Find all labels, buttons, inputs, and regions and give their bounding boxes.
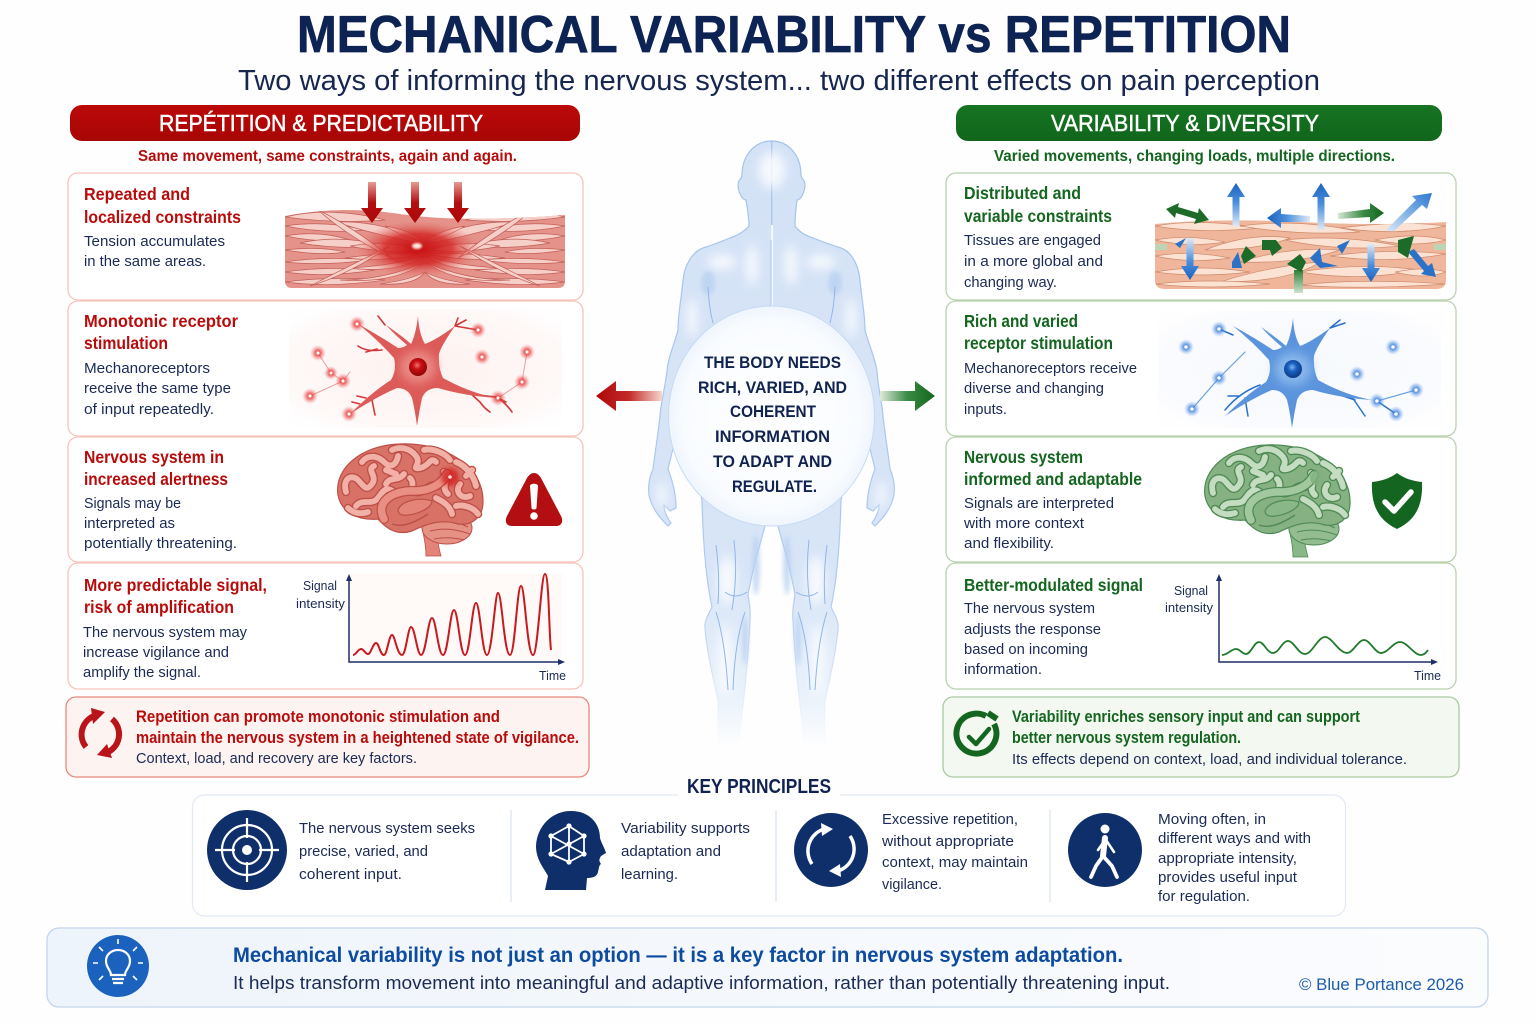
card heading: localized constraints	[84, 207, 241, 227]
card body text: Mechanoreceptors	[84, 360, 210, 377]
icon: light bulb	[87, 935, 149, 997]
card body text: in a more global and	[964, 253, 1103, 270]
central body figure	[649, 141, 894, 748]
chart axis labels: Signal	[1174, 583, 1208, 598]
card body text: information.	[964, 661, 1042, 678]
card heading: Monotonic receptor	[84, 311, 238, 331]
conclusion headline: Mechanical variability is not just an option — it is a key factor in nervous system adaptation.	[233, 943, 1123, 967]
icon: warning triangle	[506, 473, 562, 526]
callout text: maintain the nervous system in a heightened state of vigilance.	[136, 729, 579, 747]
card body text	[964, 360, 1137, 418]
card body text: Signals are interpreted	[964, 495, 1114, 512]
principle text: vigilance.	[882, 876, 942, 893]
card body text: increase vigilance and	[83, 644, 229, 661]
chart axis labels: intensity	[1165, 600, 1213, 615]
icon: cycle arrows	[794, 813, 868, 887]
arrows: multiple directions	[1166, 183, 1436, 293]
callout text: Repetition can promote monotonic stimulation and	[136, 708, 500, 726]
card body text	[963, 495, 1114, 552]
callout note: Context, load, and recovery are key factors.	[136, 750, 417, 767]
card heading: More predictable signal,	[84, 575, 267, 595]
card body text: adjusts the response	[964, 621, 1101, 638]
card heading: Better-modulated signal	[964, 575, 1143, 595]
chart: stable signal	[1165, 574, 1441, 683]
illustration: tense muscle fibres	[285, 182, 565, 288]
card: rich and varied receptor stimulation	[946, 301, 1456, 436]
card: distributed and variable constraints	[946, 173, 1456, 300]
card body text	[84, 360, 231, 418]
card heading	[84, 311, 238, 353]
card: monotonic receptor stimulation	[68, 301, 583, 436]
principle text: for regulation.	[1158, 888, 1250, 905]
card heading: risk of amplification	[84, 597, 234, 617]
principle text	[881, 811, 1028, 893]
callout note: Its effects depend on context, load, and individual tolerance.	[1012, 751, 1407, 768]
card heading: Nervous system	[964, 447, 1083, 467]
chart axis labels	[1165, 583, 1441, 683]
card body text: Tissues are engaged	[964, 232, 1101, 249]
principle 4: moving often	[1068, 811, 1311, 905]
illustration: red neuron	[289, 309, 562, 428]
principle 2: adaptation	[536, 811, 750, 890]
conclusion text: It helps transform movement into meaningful and adaptive information, rather than potentially threatening input.	[233, 972, 1170, 993]
card body text: based on incoming	[964, 641, 1088, 658]
right header banner: variability: VARIABILITY & DIVERSITY	[1051, 110, 1319, 136]
card body text: inputs.	[964, 401, 1007, 418]
principle 3: excessive repetition	[794, 811, 1028, 893]
icon: walking person	[1068, 813, 1142, 887]
left header banner: repetition	[70, 105, 580, 141]
card heading: stimulation	[84, 333, 168, 353]
callout text	[136, 708, 579, 747]
principle text: Moving often, in	[1158, 811, 1266, 828]
card body text	[964, 600, 1101, 678]
central message text: RICH, VARIED, AND	[698, 378, 847, 397]
card body text: potentially threatening.	[84, 535, 237, 552]
principle text: without appropriate	[881, 833, 1014, 850]
card heading: variable constraints	[964, 206, 1112, 226]
callout text	[1012, 708, 1360, 747]
icon: green circular check	[956, 713, 997, 754]
principle text: provides useful input	[1158, 869, 1298, 886]
copyright: © Blue Portance 2026	[1299, 975, 1464, 994]
card body text: interpreted as	[84, 515, 175, 532]
card body text: and flexibility.	[964, 535, 1054, 552]
card: repeated and localized constraints	[68, 173, 583, 300]
principle text	[299, 820, 475, 883]
subtitle: Two ways of informing the nervous system... two different effects on pain perception	[238, 65, 1320, 97]
icon: target	[207, 810, 287, 890]
left tagline: Same movement, same constraints, again and again.	[138, 148, 517, 165]
title: MECHANICAL VARIABILITY vs REPETITION	[297, 6, 1291, 64]
principle text	[1158, 811, 1311, 905]
card heading: increased alertness	[84, 469, 228, 489]
principle text: different ways and with	[1158, 830, 1311, 847]
principle text: Variability supports	[621, 820, 750, 837]
left header banner: repetition: REPÉTITION & PREDICTABILITY	[159, 110, 483, 136]
icon: red brain	[338, 444, 483, 556]
card body text: The nervous system	[964, 600, 1095, 617]
principle text: Excessive repetition,	[882, 811, 1018, 828]
principle text	[621, 820, 750, 883]
card heading: Rich and varied	[964, 311, 1078, 331]
illustration: varied tissue with multidirectional arrows	[1155, 183, 1446, 293]
icon: head with network	[536, 811, 606, 890]
card heading	[84, 184, 241, 227]
card heading	[84, 575, 267, 617]
principle text: precise, varied, and	[299, 843, 428, 860]
card body text: Signals may be	[84, 495, 181, 512]
card heading: Nervous system in	[84, 447, 224, 467]
card body text: of input repeatedly.	[84, 401, 214, 418]
card heading	[964, 311, 1113, 353]
central message text: TO ADAPT AND	[713, 452, 832, 471]
chart axis labels: Signal	[303, 578, 337, 593]
central message text	[698, 353, 847, 496]
card heading: Distributed and	[964, 183, 1081, 203]
body shading	[658, 152, 885, 696]
chart axis labels: Time	[1414, 668, 1441, 683]
right header banner: variability	[956, 105, 1442, 141]
card body text: changing way.	[964, 274, 1057, 291]
central message circle	[668, 306, 874, 526]
card body text: with more context	[963, 515, 1085, 532]
icon: green shield with check	[1372, 473, 1422, 529]
card body text	[83, 624, 247, 681]
card body text: receive the same type	[84, 380, 231, 397]
chart axis labels	[296, 578, 566, 683]
callout: repetition warning	[66, 697, 589, 777]
key principles heading: KEY PRINCIPLES	[687, 776, 831, 798]
principle text: appropriate intensity,	[1158, 850, 1297, 867]
callout text: Variability enriches sensory input and can support	[1012, 708, 1360, 726]
chart: rising signal	[296, 574, 566, 683]
callout: variability benefit	[943, 697, 1459, 777]
icon: red repeat arrows	[82, 708, 119, 758]
callout text: better nervous system regulation.	[1012, 729, 1241, 747]
icon: green brain	[1205, 445, 1350, 557]
card heading: informed and adaptable	[964, 469, 1142, 489]
card: nervous system informed and adaptable	[946, 437, 1456, 562]
card heading	[964, 447, 1142, 489]
principle text: learning.	[621, 866, 678, 883]
bottom conclusion bar	[47, 928, 1488, 1007]
card body text: Tension accumulates	[84, 233, 225, 250]
arrows pressing down	[361, 182, 469, 223]
card: predictable signal with amplification chart	[68, 563, 583, 689]
card heading: Repeated and	[84, 184, 190, 204]
principle 1: precise input	[207, 810, 475, 890]
chart axis labels: Time	[539, 668, 566, 683]
card body text: The nervous system may	[83, 624, 247, 641]
card body text	[84, 495, 237, 552]
illustration: blue neuron	[1158, 311, 1441, 428]
key principles panel	[192, 776, 1346, 916]
card body text: Mechanoreceptors receive	[964, 360, 1137, 377]
right tagline: Varied movements, changing loads, multiple directions.	[994, 148, 1395, 165]
card heading: receptor stimulation	[964, 333, 1113, 353]
card body text: in the same areas.	[84, 253, 206, 270]
principle text: context, may maintain	[882, 854, 1028, 871]
central message text: INFORMATION	[715, 427, 830, 446]
central message text: REGULATE.	[732, 477, 817, 496]
card heading	[84, 447, 228, 489]
card body text	[964, 232, 1103, 291]
card: nervous system in increased alertness	[68, 437, 583, 562]
card body text: diverse and changing	[964, 380, 1104, 397]
principle text: The nervous system seeks	[299, 820, 475, 837]
principle text: coherent input.	[299, 866, 402, 883]
principle text: adaptation and	[621, 843, 721, 860]
central message text: THE BODY NEEDS	[704, 353, 841, 372]
card heading	[964, 183, 1112, 226]
arrow: pointing right to variability	[880, 381, 935, 411]
central message text: COHERENT	[730, 402, 817, 421]
card body text	[84, 233, 225, 270]
arrow: pointing left to repetition	[596, 381, 662, 411]
card: better-modulated signal chart	[946, 563, 1456, 689]
card body text: amplify the signal.	[83, 664, 201, 681]
chart axis labels: intensity	[296, 596, 346, 611]
